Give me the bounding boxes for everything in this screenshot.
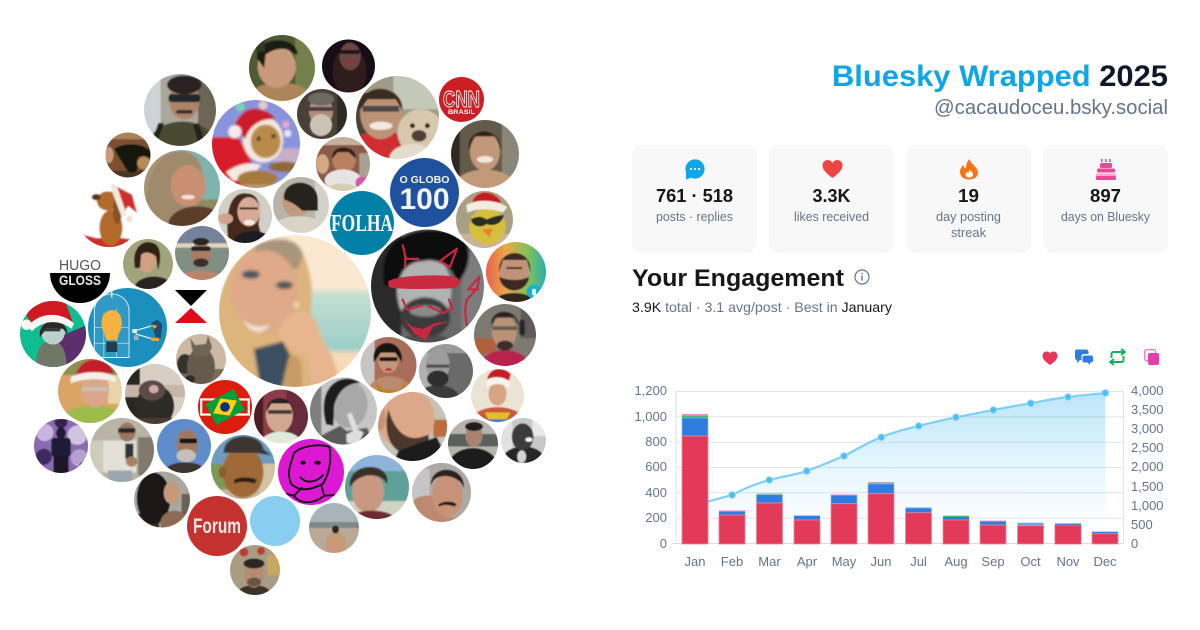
panel: days on Bluesky stat: days on Bluesky (1061, 210, 1151, 224)
avatar: duck with santa hat (456, 191, 513, 248)
avatar: thoughtful man, greyscale (307, 374, 380, 448)
avatar: man with mustache (412, 463, 471, 522)
right axis labels: 1,500 (1131, 479, 1164, 494)
avatar: dark hair on skin (106, 132, 150, 178)
avatar: O Globo 100 logo: O GLOBO (400, 174, 450, 186)
month labels: Apr (797, 554, 818, 569)
avatar: Folha logo: FOLHA (331, 211, 393, 237)
left axis labels: 0 (660, 536, 667, 551)
avatar: CNN Brasil logo: BRASIL (448, 109, 475, 116)
avatar: CNN Brasil logo: CNN (443, 86, 480, 112)
panel: day posting streak stat: 19 (958, 185, 979, 206)
avatar: tabby cat (176, 334, 226, 384)
avatar: man from behind (273, 177, 329, 233)
bar: Dec (1092, 531, 1118, 544)
panel: likes received stat (769, 145, 894, 253)
right axis labels: 3,500 (1131, 402, 1164, 417)
handle: @cacaudoceu.bsky.social (934, 97, 1168, 119)
avatar: man with sunglasses (144, 74, 216, 146)
avatar: O Globo 100 logo (390, 158, 459, 227)
bar: Feb (719, 510, 745, 544)
avatar: pink smiley doodle (278, 439, 344, 505)
avatar: shih tzu close-up (125, 364, 185, 424)
avatar: silhouette on purple (34, 419, 88, 473)
avatar: winking woman (218, 189, 272, 243)
avatar: baby eating (316, 137, 370, 191)
avatar: bearded man in profile (375, 388, 450, 464)
avatar: Forum logo (187, 496, 247, 556)
left axis labels: 200 (645, 510, 667, 525)
avatar: man as Superman with santa hat (468, 366, 527, 437)
avatar: man outdoors (249, 35, 315, 101)
panel: posts and replies stat: 761 · 518 (656, 185, 733, 206)
avatar: woman in dark (322, 40, 375, 92)
month labels: Aug (944, 554, 968, 569)
icon: quotes (1145, 350, 1159, 365)
avatar: Brazil flag on red (198, 380, 252, 434)
icon: chat bubble (685, 159, 705, 180)
avatar: man with toys behind (230, 545, 280, 595)
avatar: man with grey beard (297, 89, 347, 139)
avatar: CNN Brasil logo (439, 77, 484, 122)
avatar: beach from behind (309, 503, 359, 553)
avatar: man on the beach (175, 226, 229, 280)
heading: your engagement: Your Engagement (632, 265, 844, 292)
avatar: smiling blonde woman (144, 150, 220, 226)
month labels: Sep (981, 554, 1005, 569)
cumulative area (695, 393, 1105, 544)
avatar: cartoon girl in santa hat (20, 301, 86, 367)
panel: posts and replies stat: posts · replies (656, 210, 733, 224)
icon: flame (960, 159, 978, 180)
left axis labels: 400 (645, 485, 667, 500)
bar: Jul (906, 507, 932, 544)
avatar: man with small dog (356, 76, 439, 159)
avatar: Lightbulb in cage illustration (88, 288, 167, 367)
panel: posts and replies stat (632, 145, 757, 253)
chart: monthly engagement (634, 383, 1164, 569)
panel: days on Bluesky stat: 897 (1090, 185, 1121, 206)
bar: Aug (943, 516, 969, 544)
avatar: man laughing, black and white (499, 416, 548, 475)
cumulative points (729, 390, 1109, 498)
bar: Nov (1055, 523, 1081, 544)
avatar: main woman portrait (219, 235, 371, 387)
bar: Jan (682, 414, 708, 544)
avatar: cat in santa outfit (212, 100, 300, 188)
avatar: man with glasses, indoors (254, 390, 308, 444)
avatar: young man with dark hair (123, 239, 173, 289)
avatar: man with sea behind (345, 455, 409, 519)
chart legend (1042, 349, 1159, 365)
right axis labels: 4,000 (1131, 383, 1164, 398)
month labels: Jun (871, 554, 891, 569)
cumulative line (695, 393, 1105, 505)
month labels: Jan (685, 554, 705, 569)
right axis labels: 1,000 (1131, 498, 1164, 513)
avatar: Hugo Gloss logo: HUGO (59, 258, 101, 274)
left axis labels: 600 (645, 459, 667, 474)
left axis labels: 800 (645, 434, 667, 449)
avatar: hourglass logo (175, 290, 207, 323)
panel: day posting streak stat: streak (951, 226, 987, 240)
bar: May (831, 494, 857, 544)
month labels: Nov (1056, 554, 1080, 569)
avatar: bald bearded grey man (419, 344, 473, 398)
right axis labels: 2,500 (1131, 440, 1164, 455)
avatar: man in cap with mustache (211, 435, 275, 499)
month labels: Mar (758, 554, 781, 569)
bar: Oct (1018, 522, 1044, 544)
avatar: bald man with sunglasses, blue sky (157, 419, 211, 473)
right axis labels (1131, 383, 1164, 551)
right axis labels: 500 (1131, 517, 1153, 532)
bar: Jun (868, 482, 894, 544)
avatar: man with headphones, red hoodie (474, 304, 536, 366)
avatar: santa dachshund (83, 184, 138, 247)
icon: info (855, 270, 869, 284)
month labels: Feb (721, 554, 743, 569)
icon: reposts (1110, 349, 1125, 365)
avatar: plain light blue default (250, 496, 300, 546)
right axis labels: 0 (1131, 536, 1138, 551)
avatar: rainbow-frame man (486, 242, 546, 302)
avatar: older man in santa hat (58, 359, 122, 423)
month labels: Jul (910, 554, 927, 569)
bar: Sep (980, 520, 1006, 544)
grid lines and axes (672, 391, 1124, 544)
avatar: curly-haired woman (134, 472, 190, 528)
avatar: shirtless smiling man (451, 120, 519, 188)
panel: avatar bubble cluster (17, 32, 549, 605)
avatar: Forum logo: Forum (193, 515, 241, 538)
title: Bluesky Wrapped 2025 (832, 60, 1168, 93)
avatar: woman with glasses and orange top (360, 337, 416, 393)
left axis labels: 1,200 (634, 383, 667, 398)
avatar: Hugo Gloss logo: GLOSS (59, 272, 101, 288)
avatar: man with glasses in dark jacket (446, 416, 500, 490)
avatar: mirror selfie man (90, 418, 154, 482)
icon: likes (1042, 352, 1058, 365)
left axis labels (634, 383, 667, 551)
bar: Mar (756, 493, 782, 544)
panel: day posting streak stat: day posting (936, 210, 1001, 224)
right axis labels: 3,000 (1131, 421, 1164, 436)
month labels: Dec (1093, 554, 1117, 569)
avatar: Hugo Gloss logo (50, 258, 110, 303)
avatar: O Globo 100 logo: 100 (400, 183, 450, 216)
month labels: Oct (1020, 554, 1041, 569)
icon: heart (822, 160, 842, 178)
stacked bars (682, 414, 1118, 544)
icon: birthday cake (1096, 159, 1116, 180)
panel: likes received stat: likes received (794, 210, 869, 224)
engagement summary: 3.9K total · 3.1 avg/post · Best in January (632, 299, 892, 315)
month labels: May (832, 554, 857, 569)
icon: replies (1075, 350, 1093, 365)
bar: Apr (794, 515, 820, 544)
right axis labels: 2,000 (1131, 459, 1164, 474)
left axis labels: 1,000 (634, 409, 667, 424)
avatar: Folha logo (330, 191, 394, 255)
panel: likes received stat: 3.3K (812, 185, 851, 206)
panel: days on Bluesky stat (1043, 145, 1168, 253)
avatar: grey man with devil doodle (371, 230, 484, 342)
month labels (685, 554, 1117, 569)
panel: day posting streak stat (906, 145, 1031, 253)
